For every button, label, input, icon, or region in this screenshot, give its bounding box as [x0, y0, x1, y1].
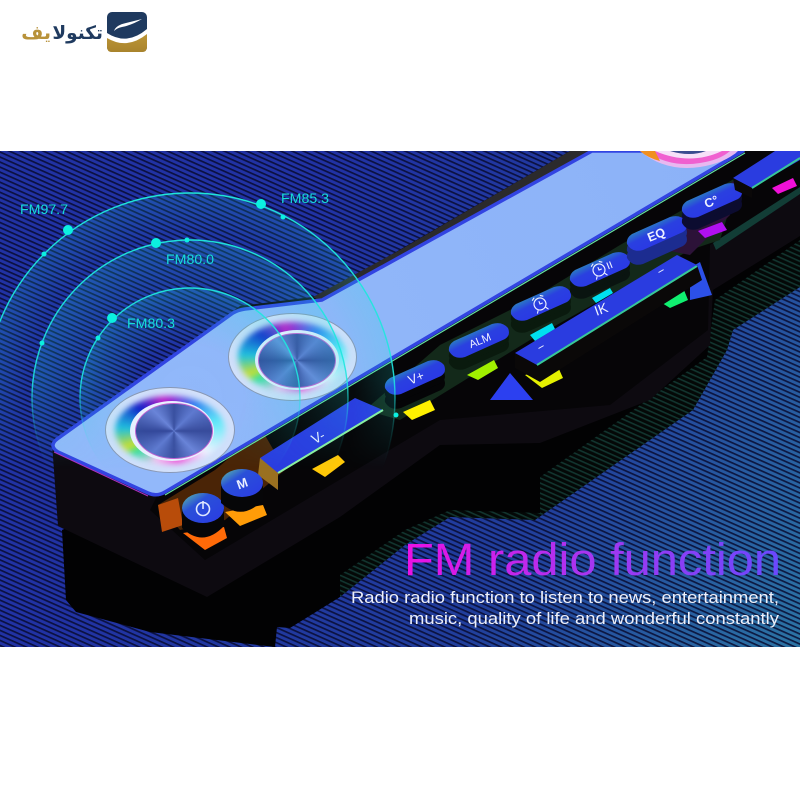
frequency labels: FM80.0	[166, 251, 214, 267]
long track key: −	[654, 263, 668, 279]
lime light ALM	[467, 360, 498, 380]
signal dots	[40, 199, 398, 418]
top panel	[53, 151, 745, 496]
blue glow patches	[490, 373, 533, 400]
key power	[182, 493, 224, 538]
magenta light right key	[772, 178, 797, 194]
logo	[21, 12, 147, 52]
yellow light V+	[403, 400, 435, 420]
middle arc	[32, 240, 348, 556]
key V+	[385, 360, 445, 409]
cyan light alarm 1	[530, 323, 555, 341]
green light long key	[664, 291, 688, 308]
key V+: V+	[406, 368, 426, 388]
long track key	[515, 255, 702, 382]
speaker driver right	[228, 313, 357, 401]
right metal disc	[258, 333, 336, 388]
key alarm 2	[570, 252, 630, 299]
FM signal arcs	[0, 193, 395, 603]
key M: M	[235, 475, 250, 492]
long track key: IK	[592, 299, 611, 319]
logo wordmark	[21, 22, 103, 44]
key C: C°	[702, 193, 721, 211]
frequency labels: FM97.7	[20, 201, 68, 217]
description	[351, 589, 780, 628]
speaker driver left	[105, 387, 235, 473]
key EQ	[627, 216, 687, 265]
logo mark	[107, 12, 147, 52]
key ALM: ALM	[467, 331, 493, 351]
speaker body	[52, 151, 800, 597]
glow behind buttons	[158, 175, 740, 532]
frequency labels: FM80.3	[127, 315, 175, 331]
speaker reflection	[62, 236, 800, 647]
lit key bases	[183, 178, 797, 550]
key alarm 1	[511, 286, 571, 333]
key M	[221, 469, 263, 512]
striped background	[0, 151, 800, 647]
logo wordmark: تکنولا	[52, 23, 103, 44]
cyan light alarm 2	[592, 288, 613, 303]
panel green edge	[165, 153, 745, 495]
inner arc	[80, 288, 300, 508]
panel pink edge	[54, 452, 148, 496]
logo wordmark: یف	[21, 22, 51, 44]
purple light C	[698, 222, 727, 238]
key V-	[258, 398, 383, 490]
left metal disc	[135, 403, 213, 459]
orange light M	[225, 505, 267, 526]
speaker driver top right	[640, 151, 738, 168]
heading: FM radio function	[404, 534, 781, 585]
long track key: −	[534, 339, 548, 355]
frequency labels: FM85.3	[281, 190, 329, 206]
top band	[313, 151, 600, 302]
infographic canvas	[0, 12, 800, 647]
orange light power	[183, 527, 227, 550]
outer arc	[0, 193, 395, 603]
right long key	[733, 151, 800, 198]
product photo	[0, 151, 800, 647]
yellow light long key	[525, 370, 563, 388]
gold light V-	[312, 455, 345, 477]
description: Radio radio function to listen to news, entertainment,	[351, 589, 779, 607]
key ALM	[449, 323, 509, 370]
left ring	[105, 387, 235, 473]
frequency labels	[20, 190, 329, 331]
right-hand tray	[713, 187, 800, 250]
right ring	[228, 313, 357, 401]
key EQ: EQ	[645, 225, 668, 245]
description: music, quality of life and wonderful constantly	[409, 610, 780, 628]
key C	[682, 183, 742, 230]
body inner recess	[150, 151, 800, 560]
key V-: V-	[308, 427, 328, 447]
